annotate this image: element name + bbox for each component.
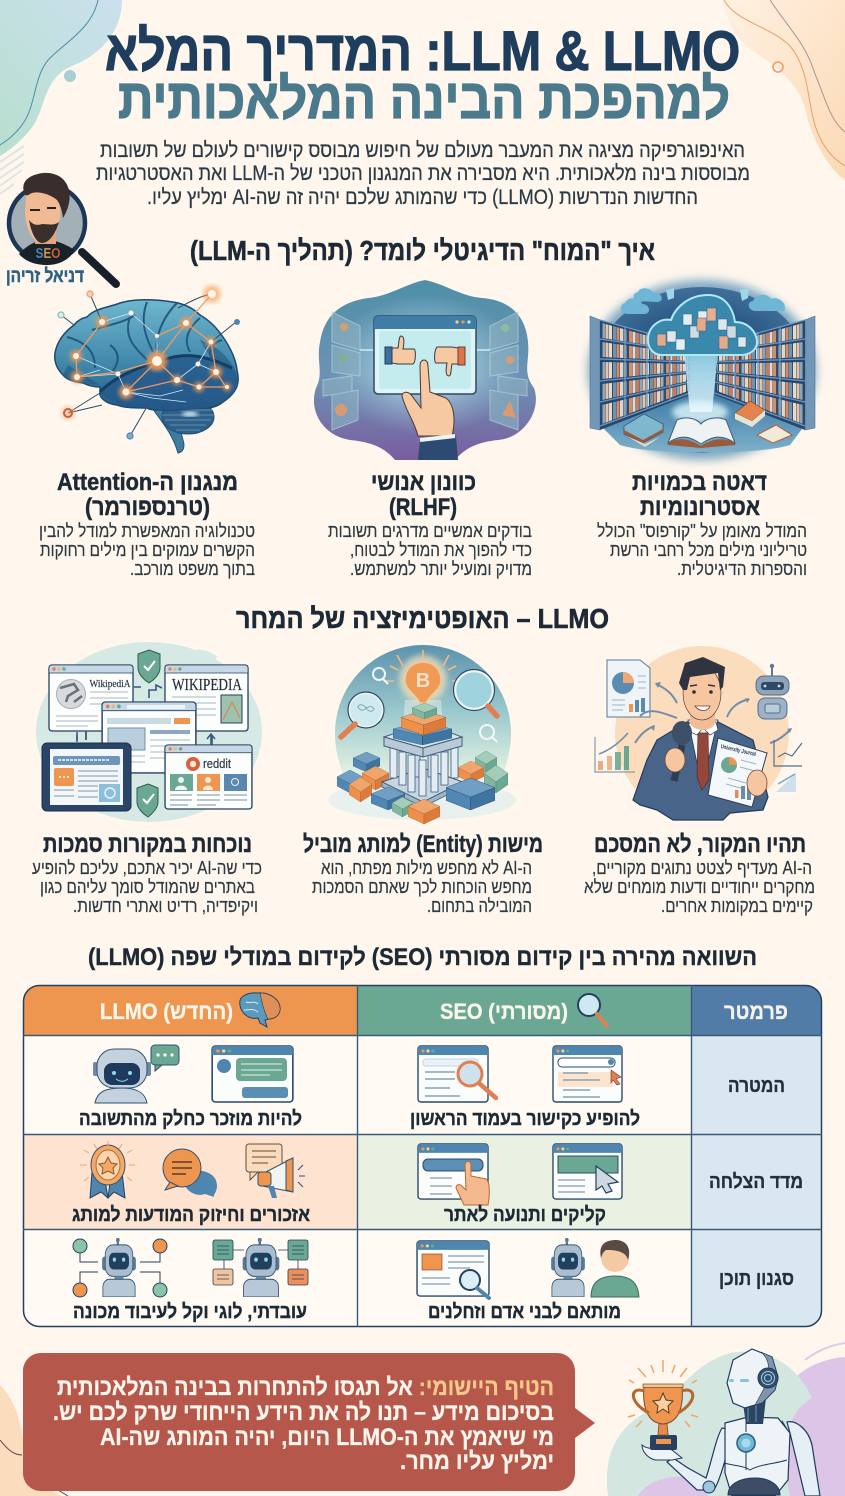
icon: window with hand (418, 1144, 489, 1205)
panel body: טכנולוגיה המאפשרת למודל להבין (39, 521, 255, 541)
title (105, 19, 740, 130)
icon: robot with data cards (213, 1238, 308, 1297)
intro text: החדשות הנדרשות (LLMO) כדי שהמותג שלכם יהיה זה שה-AI ימליץ עליו. (147, 186, 698, 209)
intro text: האינפוגרפיקה מציגה את המעבר מעולם של חיפוש מבוסס קישורים לעולם של תשובות (100, 139, 745, 162)
cell: LLMO goal (79, 1045, 302, 1130)
title: LLM & LLMO: המדריך המלא (105, 19, 740, 82)
panel body: בתוך משפט מורכב. (130, 559, 255, 579)
panel body: מדויק ומועיל יותר למשתמש. (350, 559, 532, 579)
illustration: cloud library (588, 280, 816, 460)
panel body: כדי שה-AI יכיר אתכם, עליכם להופיע (32, 858, 262, 878)
icon: brain network (55, 285, 240, 453)
panel heading: (RLHF) (389, 494, 457, 521)
heading: LLMO optimization: LLMO – האופטימיזציה של המחר (236, 603, 609, 634)
panel body: ה-AI מעדיף לצטט נתוגים מקוריים, (592, 858, 812, 878)
cell text: עובדתי, לוגי וקל לעיבוד מכונה (73, 1301, 307, 1323)
icon: megaphone (246, 1144, 305, 1198)
callout text: הטיף היישומי: אל תגסו להתחרות בבינה המלאכותית (57, 1374, 554, 1401)
panel body: ה-AI לא מחפש מילות מפתח, הוא (321, 858, 532, 878)
panel heading: כוונון אנושי (371, 469, 476, 496)
icon: robot with speech bubble (93, 1045, 179, 1103)
icon: window with cursor (553, 1144, 622, 1199)
icon: magnifier (578, 994, 607, 1026)
heading: comparison table: השוואה מהירה בין קידום מסורתי (SEO) לקידום במודלי שפה (LLMO) (88, 944, 757, 971)
icon: window with magnifier (417, 1241, 489, 1298)
row label: goal: המטרה (728, 1075, 785, 1097)
header: LLMO (100, 993, 280, 1027)
cell text: להופיע כקישור בעמוד הראשון (410, 1108, 640, 1130)
panel: be the source (584, 646, 815, 916)
decorative blob: bottom right (607, 1343, 845, 1496)
icon: search window with cursor (553, 1046, 622, 1102)
panel heading (371, 469, 476, 521)
callout background (23, 1353, 595, 1491)
cell text: להיות מוזכר כחלק מהתשובה (79, 1108, 302, 1130)
callout text: בסיכום מידע – תנו לה את הידע הייחודי שרק לכם יש. (53, 1399, 554, 1426)
cell: SEO goal (410, 1046, 640, 1130)
header: SEO: (מסורתי) SEO (440, 999, 568, 1024)
panel heading: מנגנון ה-Attention (57, 469, 238, 496)
panel body: ויקיפדיה, רדיט ואתרי חדשות. (73, 896, 258, 916)
decorative blob: top right (722, 0, 845, 180)
panel body: כדי להפוך את המודל לבטוח, (350, 540, 532, 560)
heading: how the digital brain learns: איך "המוח" הדיגיטלי לומד? (תהליך ה-LLM) (190, 235, 655, 266)
illustration: thumbs on screen (314, 280, 536, 460)
panel heading: (טרנספורמר) (85, 494, 210, 521)
panel body: באתרים שהמודל סומך עליהם כגון (40, 877, 255, 897)
panel body: בודקים אמשיים מדרגים תשובות (328, 521, 532, 541)
icon: chat window (212, 1046, 293, 1102)
cell: LLMO metric (72, 1141, 310, 1226)
panel body: טריליוני מילים מכל רחבי הרשת (610, 540, 807, 560)
comparison table (23, 985, 822, 1327)
icon: award medal (80, 1141, 135, 1198)
panel heading (57, 469, 238, 521)
author badge (6, 173, 116, 287)
cell text: מותאם לבני אדם וזחלנים (428, 1301, 621, 1323)
panel body (39, 521, 255, 579)
icon: brain (240, 993, 280, 1027)
cell: SEO metric (418, 1144, 622, 1226)
panel body: הקשרים עמוקים בין מילים רחוקות (40, 540, 255, 560)
illustration: websites: WIKIPEDIA (172, 675, 243, 694)
illustration: robot with trophy (628, 1349, 820, 1496)
author name: דניאל זריהן (6, 266, 84, 287)
panel heading: תהיו המקור, לא המסכם (594, 831, 806, 858)
panel: attention mechanism (39, 285, 255, 579)
illustration: websites: WikipediA (90, 679, 131, 690)
panel heading: אסטרונומיות (640, 494, 760, 521)
icon: speech bubbles (163, 1149, 217, 1197)
illustration: expert with report: University Journal (720, 744, 757, 758)
panel heading: מישות (Entity) למותג מוביל (303, 831, 543, 858)
header: SEO (440, 994, 607, 1026)
callout text (53, 1374, 554, 1475)
icon: robot with nodes (73, 1238, 167, 1297)
row label: success metric: מדד הצלחה (709, 1171, 803, 1193)
panel body (584, 858, 815, 916)
panel body: המודל מאומן על "קורפוס" הכולל (597, 521, 807, 541)
cell text: קליקים ותנועה לאתר (444, 1204, 606, 1226)
table cell backgrounds (23, 985, 822, 1327)
panel body: מחפש הוכחות לכך שאתם הסמכות (312, 877, 532, 897)
label: SEO: SEO (36, 246, 60, 262)
panel body: קיימים במקומות אחרים. (661, 896, 813, 916)
icon: window with magnifier (418, 1046, 496, 1102)
illustration: expert with report (595, 646, 802, 820)
panel: human tuning (314, 280, 536, 579)
panel body (312, 858, 532, 916)
panel: astronomical data (588, 280, 816, 579)
decorative blob: bottom left (0, 1385, 68, 1496)
cell: SEO style (417, 1238, 639, 1323)
cell text: אזכורים וחיזוק המודעות למותג (72, 1204, 310, 1226)
panel body (597, 521, 807, 579)
panel: authoritative sources (32, 642, 262, 916)
callout text: מי שיאמץ את ה-LLMO היום, יהיה המותג שה-AI (100, 1424, 554, 1451)
title: למהפכת הבינה המלאכותית (118, 67, 730, 130)
header: LLMO: (החדש) LLMO (100, 999, 233, 1024)
panel heading: נוכחות במקורות סמכות (43, 831, 252, 858)
panel heading (632, 469, 767, 521)
panel body (328, 521, 532, 579)
panel body: והספרות הדיגיטלית. (677, 559, 807, 579)
panel body: המובילה בתחום. (427, 896, 532, 916)
intro text (96, 139, 750, 209)
intro text: מבוססות בינה מלאכותית. היא מסבירה את המנגנון הטכני של ה-LLM ואת האסטרטגיות (96, 162, 750, 185)
panel body (32, 858, 262, 916)
panel heading: דאטה בכמויות (632, 469, 767, 496)
header: parameter: פרמטר (724, 999, 788, 1024)
row label: content style: סגנון תוכן (719, 1268, 794, 1290)
decorative blob: top left (0, 0, 122, 194)
illustration: temple on blocks: B (416, 670, 430, 692)
icon: robot and person (551, 1238, 639, 1297)
illustration: temple on blocks (328, 645, 516, 824)
illustration: websites (36, 642, 262, 822)
panel: leading entity (303, 645, 543, 916)
cell: LLMO style (73, 1238, 308, 1323)
callout: practical tip (23, 1353, 595, 1491)
callout text: ימליץ עליו מחר. (400, 1448, 554, 1475)
illustration: websites: reddit (203, 756, 231, 771)
